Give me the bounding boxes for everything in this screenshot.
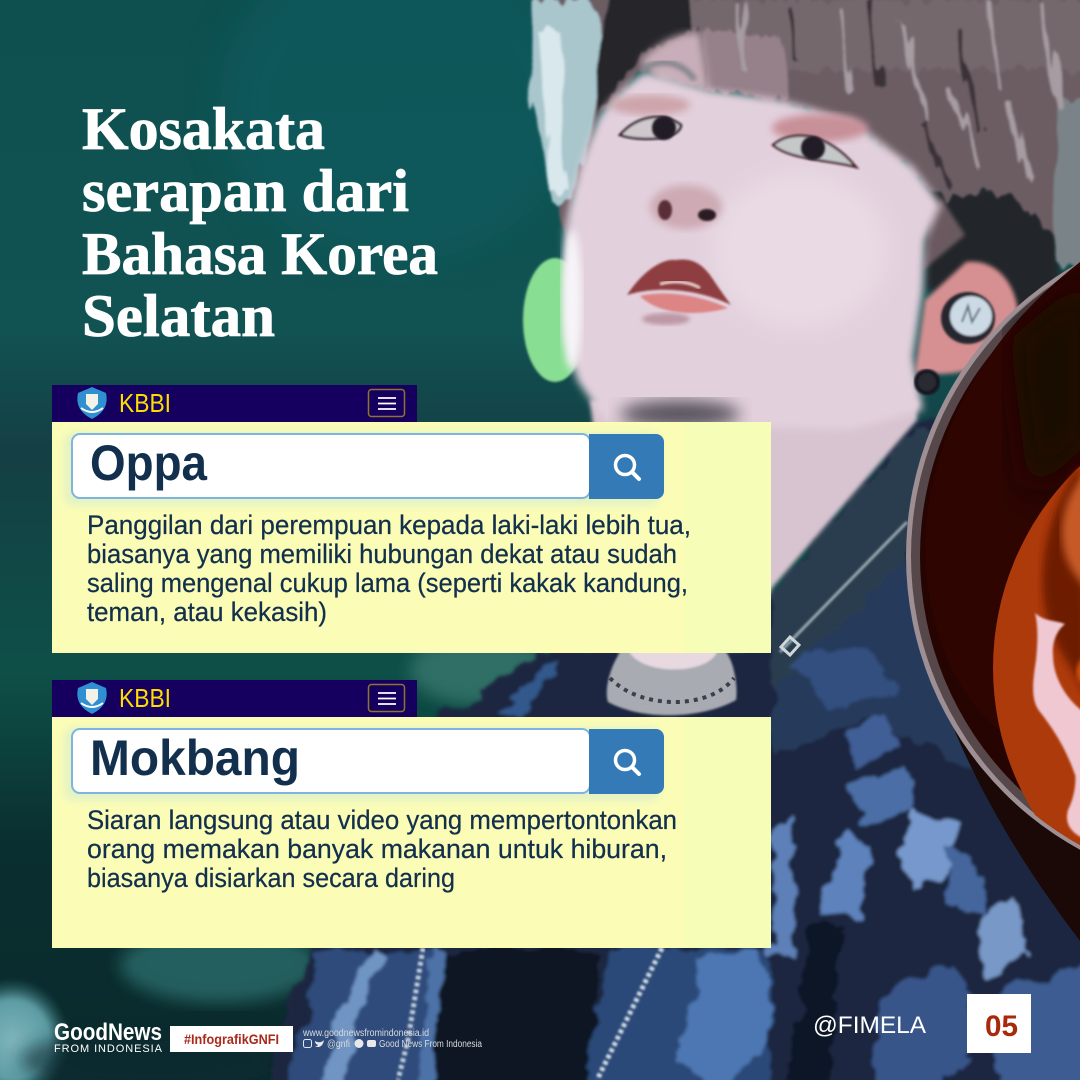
- photo: face: [562, 63, 1018, 430]
- definition text: [87, 805, 677, 893]
- definition text: orang memakan banyak makanan untuk hiburan,: [87, 834, 667, 864]
- jacket zippers: [398, 522, 907, 1080]
- earpiece: [941, 292, 995, 344]
- search box: Oppa: [90, 435, 208, 491]
- title: [82, 96, 438, 349]
- panel background: [52, 717, 771, 948]
- definition text: biasanya yang memiliki hubungan dekat atau sudah: [87, 539, 677, 569]
- KBBI header bar: [52, 680, 417, 717]
- earring: [916, 371, 938, 393]
- eye left: [620, 117, 681, 139]
- search box: Mokbang: [90, 730, 300, 786]
- photo: bowl: [906, 221, 1080, 946]
- definition text: Siaran langsung atau video yang mempertontonkan: [87, 805, 677, 835]
- photo: neck and necklace: [590, 400, 917, 715]
- KBBI header bar: KBBI: [119, 683, 171, 713]
- logo: GoodNews from Indonesia: [54, 1019, 163, 1055]
- definition text: teman, atau kekasih): [87, 597, 327, 627]
- photo: jacket: [268, 420, 1080, 1080]
- page number: 05: [985, 1010, 1018, 1043]
- lips: [627, 260, 731, 305]
- photo: hair: [529, 0, 1080, 330]
- source credit: @FIMELA: [813, 1012, 926, 1039]
- eye right: [773, 136, 856, 167]
- ear: [915, 262, 1018, 374]
- social links: Good News From Indonesia: [379, 1039, 482, 1050]
- page number: [967, 994, 1031, 1053]
- KBBI header bar: [52, 385, 417, 422]
- nose: [650, 185, 722, 229]
- hashtag badge: #InfografikGNFI: [184, 1031, 279, 1047]
- social links: @gnfi: [327, 1039, 350, 1050]
- panel background: [52, 422, 771, 653]
- title: Bahasa Korea: [82, 221, 438, 287]
- panel: Oppa: [52, 385, 771, 653]
- search box: [72, 729, 664, 794]
- definition text: saling mengenal cukup lama (seperti kakak kandung,: [87, 568, 688, 598]
- hashtag badge: [170, 1026, 293, 1052]
- KBBI header bar: KBBI: [119, 388, 171, 418]
- definition text: [87, 510, 691, 627]
- title: Selatan: [82, 283, 275, 349]
- dark hair behind sideburn: [925, 180, 1060, 330]
- social links: [302, 1028, 482, 1050]
- title: serapan dari: [82, 158, 409, 224]
- panel: Mokbang: [52, 680, 771, 948]
- social links: www.goodnewsfromindonesia.id: [302, 1028, 429, 1039]
- definition text: biasanya disiarkan secara daring: [87, 863, 455, 893]
- logo: GoodNews from Indonesia: GoodNews: [54, 1019, 162, 1046]
- definition text: Panggilan dari perempuan kepada laki-laki lebih tua,: [87, 510, 691, 540]
- logo: GoodNews from Indonesia: FROM INDONESIA: [54, 1043, 163, 1055]
- search box: [72, 434, 664, 499]
- title: Kosakata: [82, 96, 325, 162]
